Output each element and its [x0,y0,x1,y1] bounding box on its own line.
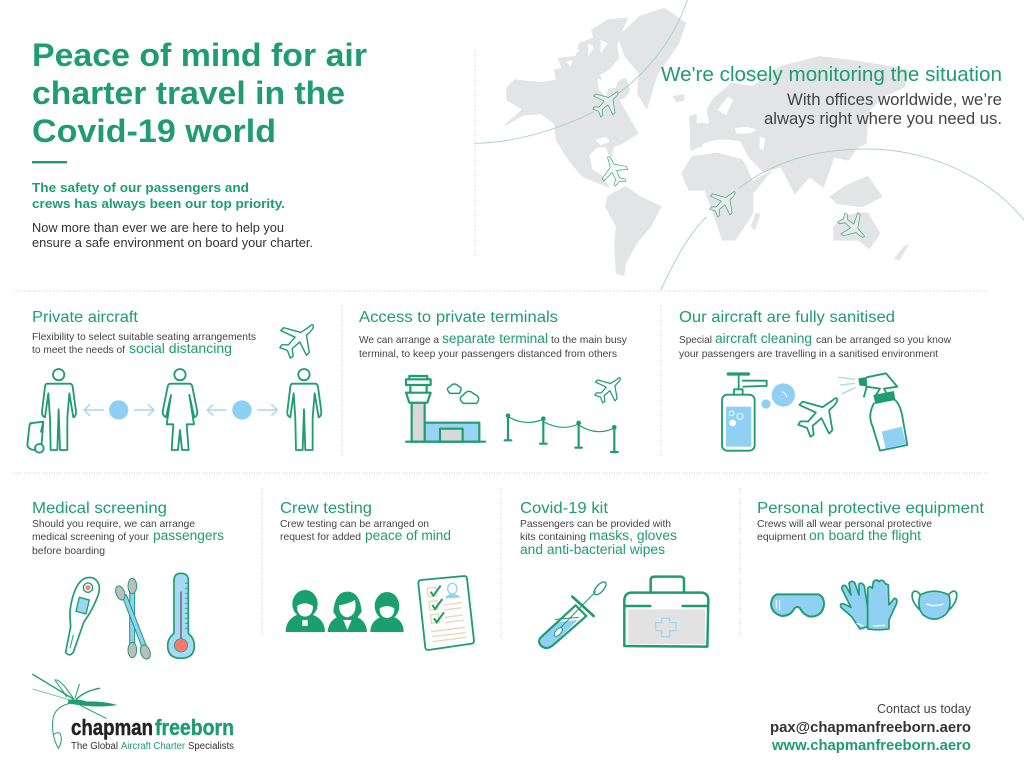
text: private aircraft description: social distancing [129,341,232,356]
map subheading [764,91,1002,128]
contact details [770,702,972,754]
icon: crew members [286,590,404,632]
heading: personal protective equipment: Personal protective equipment [757,500,985,517]
text: covid-19 kit description: and anti-bacterial wipes [520,542,665,557]
icon: social distancing people [27,369,321,453]
text: sanitised aircraft description [679,331,951,360]
intro highlight text [32,180,285,211]
logo: chapman freeborn: chapman [71,715,153,740]
logo: chapman freeborn: freeborn [155,715,234,740]
text: private terminals description: separate terminal [442,331,548,346]
icon: test tube and swab [539,580,608,648]
icon: airport terminal and tower [406,376,485,442]
text: medical screening description: medical screening of your [32,532,150,543]
text: private aircraft description: to meet the needs of [32,345,125,356]
panel: sanitised aircraft [679,309,951,451]
text: private aircraft description: Flexibility to select suitable seating arrangements [32,332,256,343]
intro highlight text: The safety of our passengers and [32,180,249,195]
map subheading: always right where you need us. [764,110,1002,128]
map subheading: With offices worldwide, we’re [787,91,1002,109]
heading: crew testing: Crew testing [280,500,372,517]
heading: private aircraft: Private aircraft [32,309,139,326]
intro body text: Now more than ever we are here to help you [32,221,284,235]
icon: soap dispenser [722,372,795,451]
text: sanitised aircraft description: aircraft cleaning [715,331,812,346]
heading: sanitised aircraft: Our aircraft are fully sanitised [679,309,895,326]
text: covid-19 kit description [520,519,677,557]
text: private terminals description: We can arrange a [359,335,439,346]
icon: test checklist [418,576,474,650]
text: crew testing description: peace of mind [365,528,451,543]
icon: queue barrier [505,413,618,452]
contact details: pax@chapmanfreeborn.aero [770,720,971,736]
panel: personal protective equipment [757,500,985,630]
title: Peace of mind for air [32,37,367,73]
icon: plane [798,398,837,437]
heading: private terminals: Access to private terminals [359,309,558,326]
contact details: Contact us today [877,702,972,716]
icon: gloves [840,580,897,630]
logo: chapman freeborn: The Global [71,741,118,752]
icon: mercury thermometer [168,573,194,658]
text: crew testing description: Crew testing can be arranged on [280,519,429,530]
text: ppe description [757,519,932,543]
text: crew testing description: request for added [280,532,361,543]
heading: medical screening: Medical screening [32,500,167,517]
text: medical screening description: Should you require, we can arrange [32,519,195,530]
logo: chapman freeborn: Aircraft Charter [121,741,186,752]
icon: digital thermometer [66,577,99,655]
text: crew testing description [280,519,451,543]
text: medical screening description: passengers [153,528,224,543]
icon: plane [280,325,313,358]
text: ppe description: equipment [757,532,806,543]
icon: spray bottle [838,373,907,451]
panel: crew testing [280,500,474,650]
text: covid-19 kit description: kits containing [520,532,586,543]
icon: cotton swabs [114,578,152,660]
intro body text [32,221,313,250]
text: private terminals description: to the main busy [551,335,628,346]
text: private aircraft description [32,332,256,356]
title [32,37,367,149]
icon: first aid kit [624,577,708,647]
text: private terminals description: terminal, to keep your passengers distanced from others [359,349,617,360]
text: ppe description: Crews will all wear personal protective [757,519,932,530]
title rule [32,161,67,163]
text: sanitised aircraft description: your passengers are travelling in a sanitised environment [679,349,938,360]
map heading: We're closely monitoring the situation [661,64,1002,86]
logo: chapman freeborn: Specialists [188,741,234,752]
text: sanitised aircraft description: can be arranged so you know [816,335,951,346]
icon: goggles [771,594,824,617]
text: medical screening description [32,519,224,557]
title: charter travel in the [32,75,345,111]
text: ppe description: on board the flight [809,528,921,543]
logo: chapman freeborn [33,674,234,752]
panel: world map [474,0,1024,290]
contact details: www.chapmanfreeborn.aero [771,738,971,754]
icon: plane [595,378,620,403]
intro body text: ensure a safe environment on board your charter. [32,236,313,250]
heading: covid-19 kit: Covid-19 kit [520,500,609,517]
text: medical screening description: before boarding [32,546,105,557]
title: Covid-19 world [32,113,276,149]
intro highlight text: crews has always been our top priority. [32,196,285,211]
panel: covid-19 kit [520,500,708,648]
panel: private aircraft [27,309,321,453]
panel: private terminals [359,309,628,452]
text: sanitised aircraft description: Special [679,335,712,346]
text: covid-19 kit description: Passengers can be provided with [520,519,671,530]
text: private terminals description [359,331,628,360]
panel: medical screening [32,500,224,660]
text: covid-19 kit description: masks, gloves [589,528,677,543]
icon: face mask [912,591,957,619]
